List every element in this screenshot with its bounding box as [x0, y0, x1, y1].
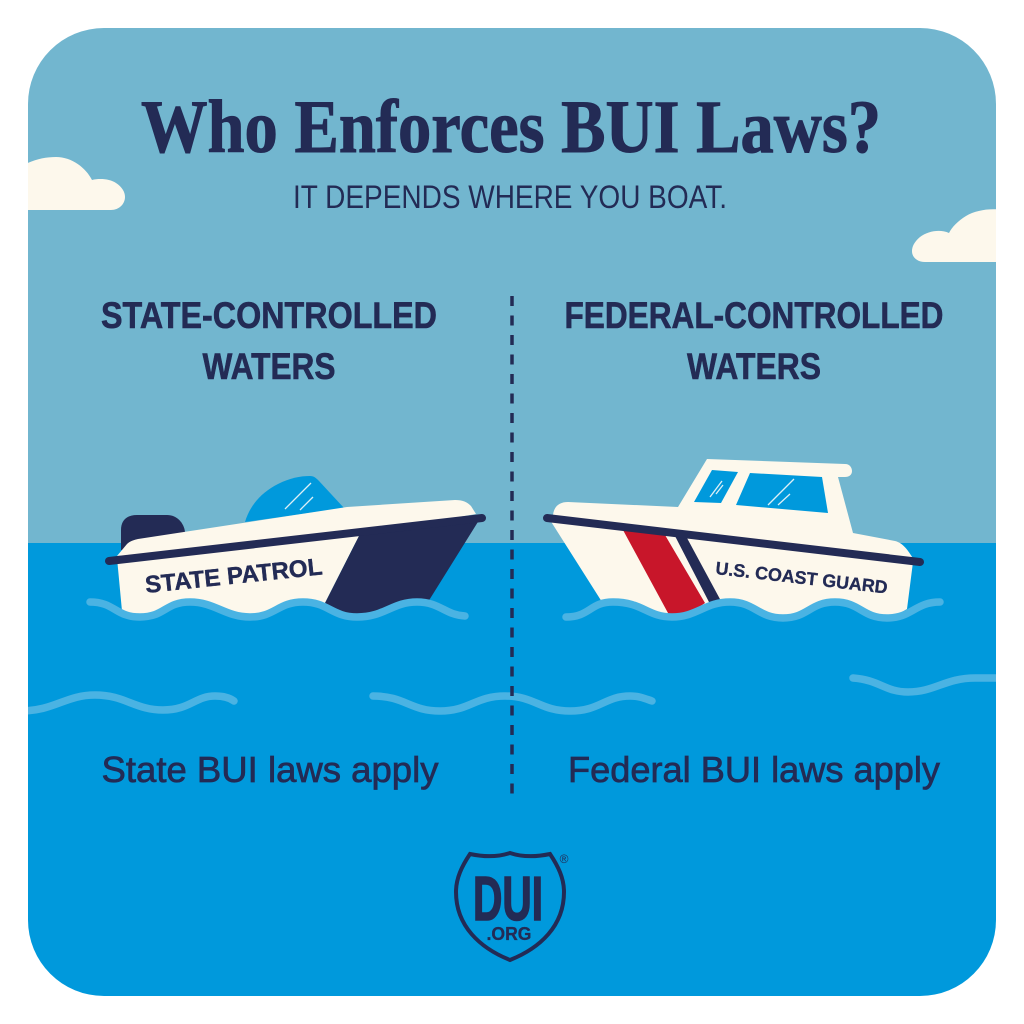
- logo: DUI.org shield: [456, 852, 569, 960]
- heading: state-controlled waters: STATE-CONTROLLED: [101, 295, 437, 336]
- wave: lower left: [20, 695, 234, 711]
- lower hull: navy bow: [325, 517, 481, 617]
- divider: dashed line: [510, 296, 514, 794]
- wave: lower center: [373, 696, 652, 711]
- red stripe: [623, 530, 705, 617]
- lower hull: [550, 520, 913, 618]
- heading: state-controlled waters: WATERS: [202, 346, 336, 387]
- heading: federal-controlled waters: [564, 295, 944, 387]
- text: federal laws: Federal BUI laws apply: [568, 749, 940, 790]
- windshield: [245, 476, 344, 522]
- left cabin window: [694, 470, 738, 503]
- boat name: STATE PATROL: [144, 554, 324, 599]
- outboard motor: [121, 515, 185, 550]
- subtitle: IT DEPENDS WHERE YOU BOAT.: [293, 179, 727, 215]
- logo: DUI.org shield: DUI: [473, 865, 543, 934]
- navy stripe: [675, 536, 721, 604]
- wave: [90, 602, 465, 617]
- logo: DUI.org shield: .ORG: [486, 924, 532, 944]
- heading: federal-controlled waters: FEDERAL-CONTROLLED: [564, 295, 944, 336]
- title: Who Enforces BUI Laws?: [141, 86, 881, 169]
- lower hull: cream: [117, 532, 361, 617]
- cabin and upper hull: [553, 459, 914, 560]
- wave: [566, 602, 940, 618]
- upper hull: [117, 500, 476, 556]
- boat name: U.S. COAST GUARD: [715, 558, 889, 598]
- heading: federal-controlled waters: WATERS: [687, 346, 821, 387]
- rail: [109, 518, 482, 561]
- icon: right cloud: [912, 209, 1004, 262]
- icon: state patrol boat: [90, 476, 482, 617]
- icon: coast guard boat: [547, 459, 940, 618]
- text: state laws: State BUI laws apply: [102, 749, 438, 790]
- logo: DUI.org shield: ®: [560, 852, 569, 866]
- heading: state-controlled waters: [101, 295, 437, 387]
- rail: [547, 518, 920, 562]
- wave: lower right: [853, 678, 1004, 692]
- right cabin window: [736, 473, 828, 513]
- icon: left cloud: [20, 157, 125, 210]
